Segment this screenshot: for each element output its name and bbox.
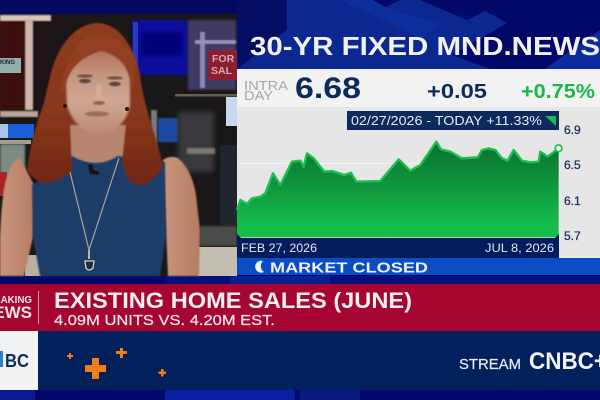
screen: blue wall [132, 20, 188, 75]
studio backdrop [0, 14, 237, 276]
y axis labels: 6.9 [564, 123, 581, 137]
subheadline: 4.09M UNITS VS. 4.20M EST. [54, 313, 275, 329]
presenter lapel mic [88, 164, 100, 175]
y axis labels [564, 123, 581, 243]
headline: existing home sales: EXISTING HOME SALES (JUNE) [54, 288, 412, 313]
date range badge [347, 111, 559, 130]
value: rate: 6.68 [295, 72, 361, 105]
market closed bar: MARKET CLOSED [270, 260, 428, 276]
photo: studio presenter [0, 14, 237, 276]
headline: 30-YR FIXED MND.NEWS: 30-YR FIXED MND.NEWS [250, 31, 600, 61]
label: intraday: DAY [244, 89, 274, 103]
chart panel [237, 107, 600, 258]
presenter arms and shoulders [0, 157, 200, 276]
value: point change: +0.05 [427, 81, 487, 103]
market closed bar [237, 258, 600, 276]
value: percent change: +0.75% [521, 81, 595, 103]
presenter neck and chest [62, 110, 134, 165]
presenter hair [27, 23, 163, 185]
ticker bar [0, 331, 600, 390]
y axis labels: 6.1 [564, 194, 581, 208]
quote row panel [237, 69, 600, 107]
area chart [237, 142, 562, 237]
CNBC logo tile [0, 331, 38, 390]
presenter bangs [60, 33, 136, 96]
CNBC logo tile: BC [5, 351, 29, 371]
screen: for sale sign [188, 20, 236, 90]
x axis date strip: JUL 8, 2026 [485, 241, 554, 255]
presenter facial features [63, 74, 129, 117]
icon: crescent moon [255, 261, 264, 273]
x axis date strip: FEB 27, 2026 [241, 241, 317, 255]
breaking news tag [0, 294, 32, 322]
x axis date strip [237, 234, 559, 258]
studio backdrop: SAL [211, 65, 233, 77]
label: intraday [244, 79, 289, 103]
studio backdrop: FOR [212, 53, 235, 65]
y axis labels: 6.5 [564, 158, 581, 172]
presenter sleeveless dress [32, 156, 166, 276]
date range badge: 02/27/2026 - TODAY +11.33% [351, 114, 542, 128]
studio backdrop: KING [0, 60, 15, 66]
presenter necklace [70, 158, 119, 270]
breaking news banner [0, 284, 600, 331]
presenter face [66, 50, 130, 134]
stream label: STREAM [459, 357, 521, 373]
y axis labels: 5.7 [564, 229, 581, 243]
icon: orange plus sparkles [67, 348, 166, 379]
label: intraday: INTRA [244, 79, 289, 93]
